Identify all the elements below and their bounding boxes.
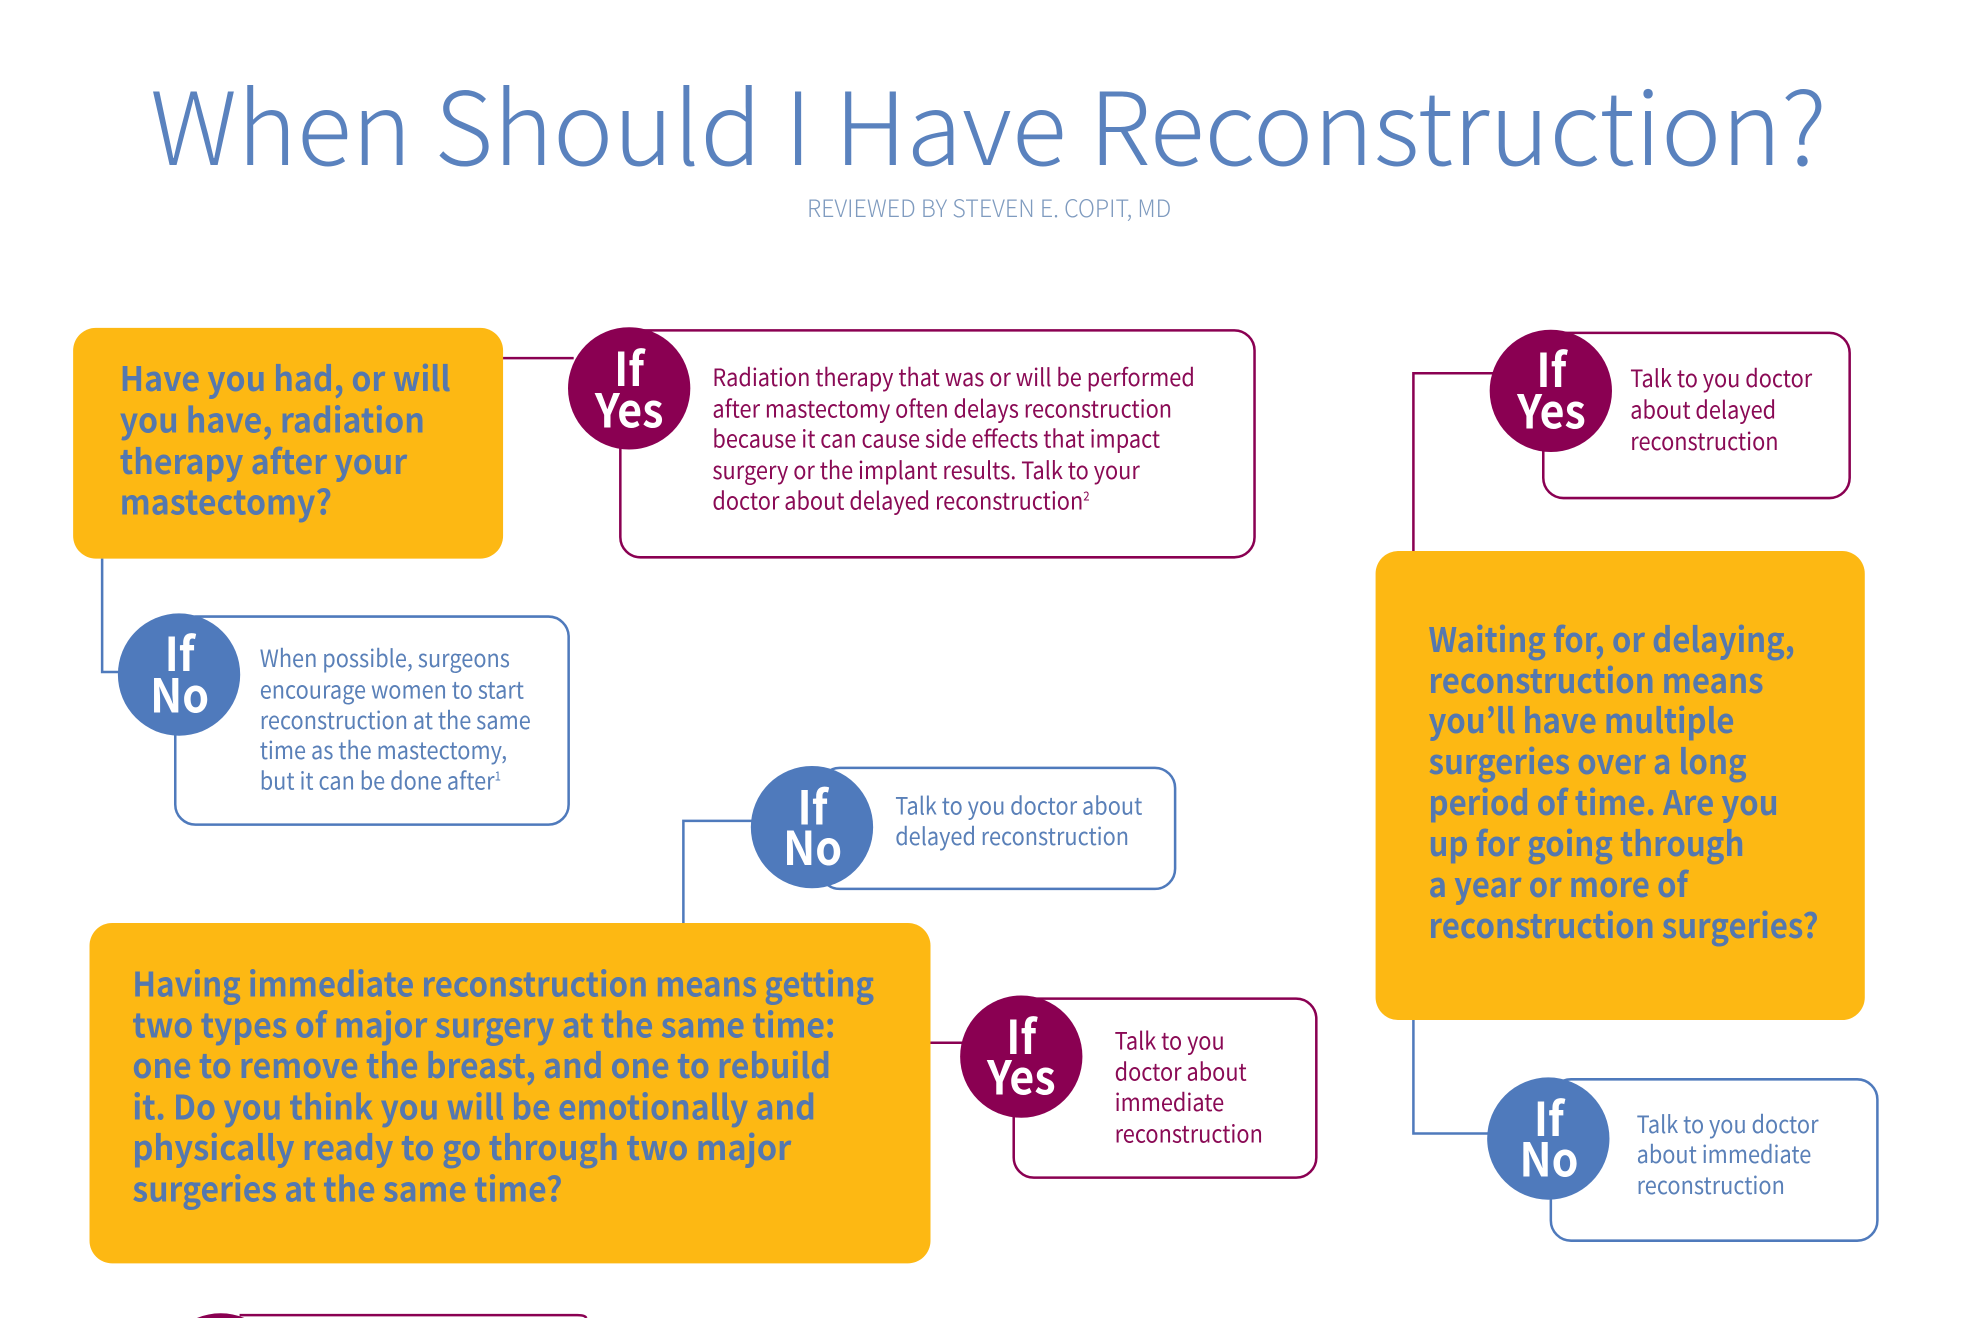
panel: immediate reconstruction question: physically ready to go through two major [132, 1120, 792, 1170]
panel: immediate if yes: immediate [1115, 1083, 1224, 1118]
panel: radiation therapy question: you have, radiation [120, 393, 425, 443]
panel: delaying reconstruction question: period of time. Are you [1429, 777, 1779, 826]
panel: immediate reconstruction question: one to remove the breast, and one to rebuild [132, 1039, 831, 1088]
panel: delaying if no [1487, 1077, 1877, 1241]
panel: delaying if no: about immediate [1637, 1135, 1811, 1170]
panel: delaying reconstruction question: surgeries over a long [1429, 736, 1747, 785]
panel: immediate if no: delayed reconstruction [895, 817, 1129, 852]
panel: radiation if yes: Yes [594, 373, 663, 441]
arrow: radiation yes connector [503, 357, 574, 359]
arrow: delaying no connector [1413, 1020, 1494, 1134]
arrow: immediate no connector [683, 821, 757, 923]
panel: delaying if yes [1490, 330, 1850, 498]
panel: radiation if yes [568, 327, 1255, 557]
panel: delaying if no: If [1534, 1082, 1566, 1150]
panel: delaying if yes: about delayed [1630, 390, 1776, 426]
panel: immediate reconstruction question: Having immediate reconstruction means getting [132, 958, 874, 1007]
arrow: immediate yes connector [931, 1042, 965, 1044]
byline: REVIEWED BY STEVEN E. COPIT, MD [807, 189, 1171, 224]
panel: radiation if no: encourage women to start [260, 670, 524, 706]
panel: immediate reconstruction question: it. Do you think you will be emotionally and [132, 1081, 816, 1130]
panel: immediate if no: No [783, 811, 842, 878]
panel: radiation if no: No [150, 658, 209, 726]
panel: delaying reconstruction question [1376, 551, 1865, 1020]
panel: radiation if no: time as the mastectomy, [260, 731, 507, 766]
panel: radiation if yes: Radiation therapy that was or will be performed [712, 358, 1195, 393]
panel: radiation if no: When possible, surgeons [260, 639, 510, 674]
panel: delaying if yes: If [1536, 333, 1569, 401]
panel: cut-off bottom box [197, 1313, 586, 1318]
panel: delaying if no: Talk to you doctor [1637, 1105, 1819, 1140]
panel: radiation if no: If [165, 617, 197, 684]
panel: radiation if yes: because it can cause side effects that impact [712, 419, 1160, 455]
arrow: radiation no connector [102, 559, 126, 672]
panel: delaying reconstruction question: reconstruction means [1429, 654, 1764, 703]
panel: immediate if yes [960, 995, 1316, 1178]
panel: delaying reconstruction question: a year or more of [1429, 859, 1690, 908]
panel: radiation therapy question [73, 328, 503, 559]
panel: radiation therapy question: Have you had, or will [120, 352, 450, 401]
panel: immediate reconstruction question [90, 923, 931, 1263]
panel: delaying if yes: reconstruction [1630, 422, 1779, 457]
panel: immediate if yes: Talk to you [1115, 1021, 1225, 1057]
panel: immediate if no [751, 766, 1175, 889]
panel: immediate reconstruction question: surgeries at the same time? [132, 1162, 563, 1212]
panel: radiation if no: but it can be done after [260, 761, 501, 797]
panel: delaying reconstruction question: you’ll have multiple [1429, 695, 1735, 744]
panel: delaying reconstruction question: reconstruction surgeries? [1429, 900, 1819, 949]
panel: radiation therapy question: mastectomy? [120, 475, 332, 525]
panel: radiation if yes: If [614, 332, 646, 399]
panel: delaying reconstruction question: up for going through [1429, 818, 1744, 867]
panel: delaying if yes: Talk to you doctor [1630, 359, 1812, 394]
panel: delaying if no: reconstruction [1637, 1166, 1785, 1201]
panel: immediate if yes: If [1006, 1000, 1039, 1068]
panel: delaying if no: No [1519, 1122, 1578, 1190]
panel: immediate if yes: doctor about [1115, 1052, 1247, 1088]
panel: radiation if no: 1 [495, 767, 501, 785]
panel: immediate if yes: reconstruction [1115, 1114, 1263, 1150]
panel: radiation if yes: surgery or the implant results. Talk to your [712, 451, 1140, 486]
panel: radiation if no [118, 613, 569, 825]
panel: delaying reconstruction question: Waiting for, or delaying, [1429, 613, 1795, 662]
panel: radiation if no: reconstruction at the same [260, 701, 531, 736]
panel: immediate if no: If [798, 770, 830, 838]
panel: immediate reconstruction question: two types of major surgery at the same time: [132, 999, 835, 1048]
title: When Should I Have Reconstruction? [150, 49, 1827, 195]
panel: immediate if yes: Yes [986, 1040, 1056, 1108]
panel: radiation if yes: 2 [1083, 487, 1090, 505]
panel: radiation if yes: after mastectomy often delays reconstruction [712, 389, 1172, 425]
panel: delaying if yes: Yes [1516, 375, 1586, 442]
arrow: delaying yes connector [1413, 373, 1494, 551]
panel: immediate if no: Talk to you doctor about [895, 786, 1143, 822]
panel: radiation if yes: doctor about delayed reconstruction [712, 481, 1090, 517]
panel: radiation therapy question: therapy after your [120, 435, 408, 484]
